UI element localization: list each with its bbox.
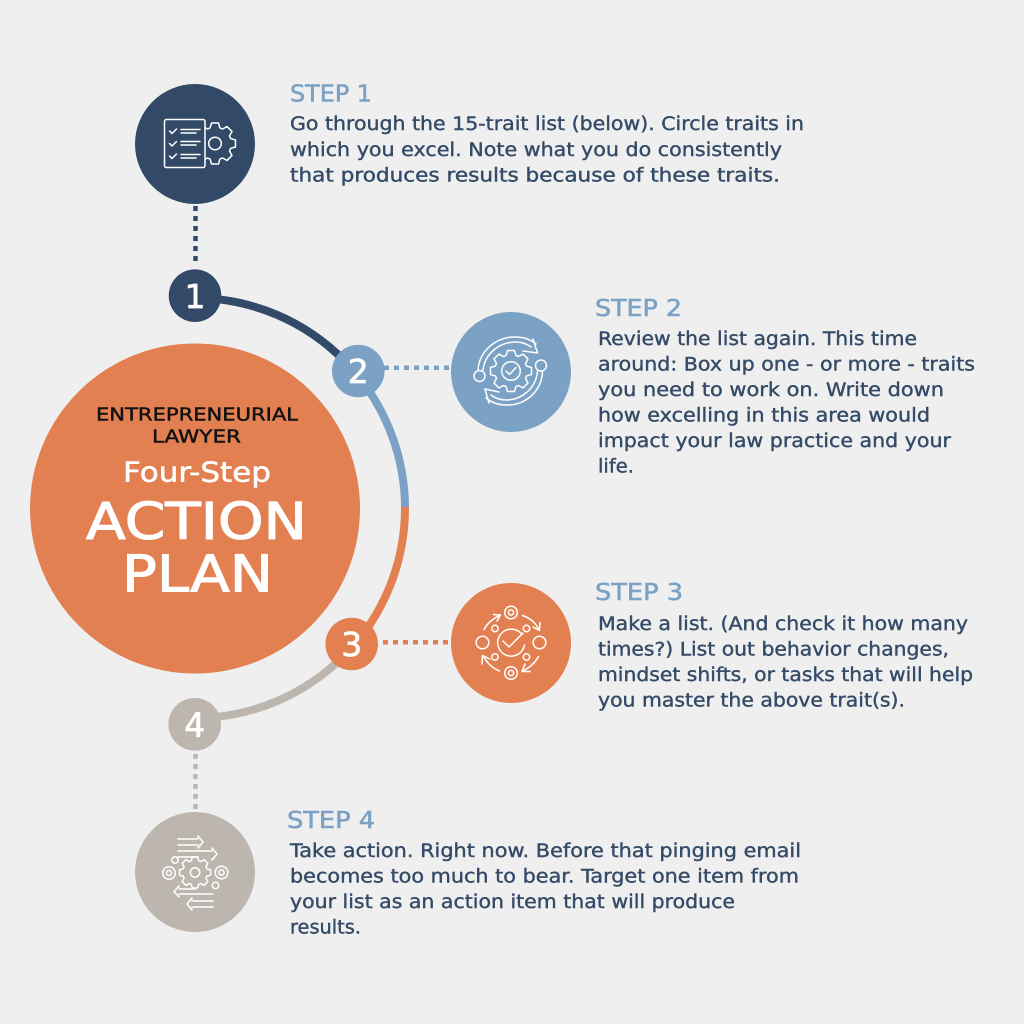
body: step 3: Make a list. (And check it how many	[598, 614, 968, 635]
connector: step 1 dotted line	[193, 206, 198, 266]
heading: step 1: STEP 1	[290, 82, 372, 108]
body: step 2: impact your law practice and your	[598, 431, 951, 452]
body: step 1	[290, 114, 804, 186]
heading: step 3: STEP 3	[595, 580, 683, 606]
number badge 1	[169, 269, 221, 322]
body: step 4: Take action. Right now. Before that pinging email	[289, 841, 801, 862]
connector: step 3 dotted line	[383, 640, 452, 645]
body: step 2: how excelling in this area would	[598, 406, 930, 426]
body: step 3: mindset shifts, or tasks that will help	[598, 665, 973, 686]
icon: checklist and gear	[135, 84, 255, 204]
body: step 2: around: Box up one - or more - traits	[598, 354, 975, 376]
heading: step 2: STEP 2	[595, 296, 682, 322]
body: step 1: that produces results because of these traits.	[290, 166, 780, 186]
number badge 4	[168, 698, 221, 751]
connector: step 4 dotted line	[193, 754, 198, 812]
step 3 text	[595, 580, 973, 712]
central circle with title	[30, 344, 360, 674]
title: Entrepreneurial Lawyer: LAWYER	[152, 427, 241, 448]
body: step 3: you master the above trait(s).	[598, 690, 905, 712]
number badge 2	[332, 345, 385, 397]
body: step 3	[598, 614, 973, 712]
curved timeline arc	[195, 298, 405, 718]
title: Action Plan: PLAN	[122, 545, 273, 604]
body: step 2: you need to work on. Write down	[598, 380, 944, 401]
icon: gear with cycle arrows	[451, 312, 571, 432]
step 1 text	[290, 82, 804, 186]
body: step 2: Review the list again. This time	[598, 329, 917, 350]
title: Four-Step: Four-Step	[123, 457, 271, 489]
body: step 2	[598, 329, 975, 478]
body: step 4: becomes too much to bear. Target one item from	[290, 866, 799, 888]
icon: gear with opposing arrows	[135, 812, 255, 932]
body: step 4: results.	[290, 918, 361, 938]
title: Action Plan	[86, 492, 307, 604]
body: step 2: life.	[598, 456, 634, 478]
heading: step 4: STEP 4	[287, 808, 375, 834]
icon: check with circular process	[451, 583, 571, 703]
body: step 3: times?) List out behavior changes,	[598, 640, 949, 660]
number badge 3: 3	[341, 625, 362, 664]
body: step 4	[289, 841, 801, 938]
body: step 1: which you excel. Note what you do consistently	[290, 140, 782, 161]
number badge 3	[325, 618, 378, 670]
connector: step 2 dotted line	[384, 365, 452, 370]
body: step 1: Go through the 15-trait list (below). Circle traits in	[290, 114, 804, 135]
title: Action Plan: ACTION	[86, 492, 307, 551]
title: Entrepreneurial Lawyer: ENTREPRENEURIAL	[96, 405, 298, 426]
body: step 4: your list as an action item that will produce	[290, 892, 735, 913]
step 4 text	[287, 808, 801, 938]
number badge 4: 4	[184, 706, 205, 744]
number badge 2: 2	[348, 352, 369, 391]
number badge 1: 1	[184, 277, 206, 316]
step 2 text	[595, 296, 975, 478]
title: Entrepreneurial Lawyer	[96, 405, 298, 448]
